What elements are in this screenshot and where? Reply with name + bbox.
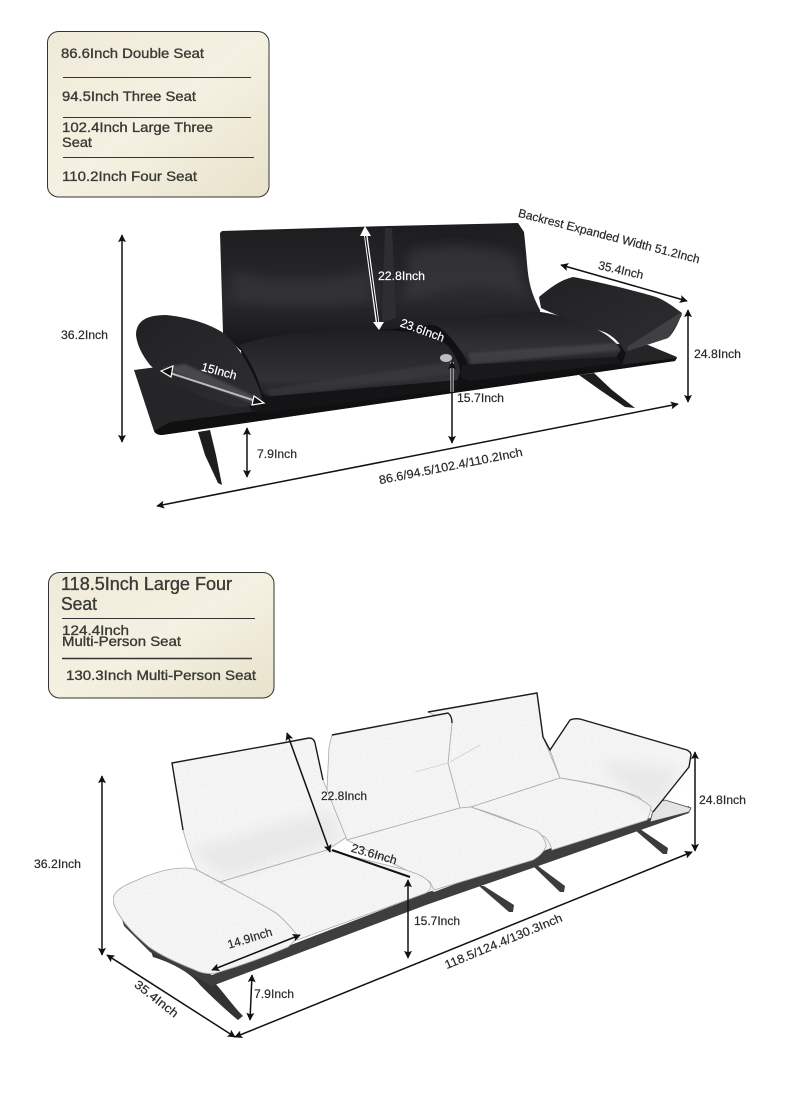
black leather sofa (134, 223, 682, 485)
platform frame (121, 806, 689, 986)
left base leg (149, 946, 243, 1020)
dimension: leg height 7.9: 7.9Inch (254, 987, 294, 1001)
panel: sizes large four to multi-person: 124.4Inch (62, 622, 129, 638)
panel: sizes double to four seat: 102.4Inch Large Three (62, 119, 213, 135)
right armrest (550, 719, 691, 812)
cushion tufts (415, 745, 480, 772)
panel: sizes large four to multi-person: Multi-Person Seat (62, 633, 181, 649)
backrest (220, 223, 541, 350)
sofa legs (198, 373, 635, 485)
dimension: backrest height 22.8 (360, 226, 425, 330)
seat backing fill (347, 778, 650, 892)
dimension: leg height 7.9 (250, 975, 294, 1020)
textured upholstery (113, 693, 691, 974)
dimension: backrest height 22.8: 22.8Inch (378, 269, 425, 283)
dimension: arm height 24.8: 24.8Inch (699, 793, 746, 807)
soft shading (190, 760, 680, 878)
panel: sizes double to four seat: Seat (62, 134, 92, 150)
dimension: armrest 14.9: 14.9Inch (226, 925, 274, 952)
upper outlines (172, 693, 691, 830)
panel: sizes double to four seat: 94.5Inch Three Seat (62, 88, 196, 104)
sofa legs (479, 829, 668, 912)
right backrest (428, 693, 560, 808)
dimension: backrest height 22.8: 22.8Inch (321, 789, 367, 803)
dimension: arm height 24.8 (695, 752, 746, 851)
dimension: seat height 15.7 (408, 880, 460, 958)
middle seat (347, 807, 546, 890)
white boucle sofa (113, 693, 691, 1020)
dimension: depth 35.4 (561, 258, 687, 301)
panel: sizes large four to multi-person (48, 572, 274, 698)
dimension: arm height 24.8: 24.8Inch (694, 347, 741, 361)
left backrest (172, 738, 347, 882)
dimension: backrest height 22.8 (287, 733, 367, 852)
dimension: seat depth 23.6: 23.6Inch (398, 316, 446, 345)
dimension: total height 36.2: 36.2Inch (61, 328, 108, 342)
left armrest cushion (113, 868, 299, 974)
right seat (471, 778, 651, 850)
panel: sizes double to four seat: 86.6Inch Double Seat (61, 45, 204, 61)
left seat (220, 850, 431, 940)
shadow under seats (240, 325, 628, 414)
dimension: total width (157, 404, 678, 506)
dimension: total width: 118.5/124.4/130.3Inch (443, 911, 564, 972)
dimension: total width: 86.6/94.5/102.4/110.2Inch (378, 445, 524, 487)
dimension: depth 35.4: 35.4Inch (132, 977, 181, 1020)
middle backrest (327, 713, 460, 840)
panel: sizes double to four seat (48, 32, 269, 197)
right seat cushion (426, 312, 621, 366)
dimension: seat depth 23.6 (332, 841, 410, 877)
metal highlight (440, 354, 452, 362)
dimension: leg height 7.9 (247, 428, 297, 477)
dimension: armrest 15: 15Inch (200, 360, 238, 383)
panel: sizes double to four seat: 110.2Inch Four Seat (62, 168, 197, 184)
dimension: depth 35.4 (107, 955, 235, 1037)
dimension: armrest 15 (161, 360, 264, 405)
dimension: seat height 15.7 (452, 362, 504, 443)
left armrest (136, 315, 262, 407)
panel: sizes large four to multi-person: 118.5Inch Large Four (61, 574, 232, 594)
panel: sizes large four to multi-person: 130.3Inch Multi-Person Seat (66, 667, 256, 683)
dimension: total height 36.2: 36.2Inch (34, 857, 81, 871)
dimension: leg height 7.9: 7.9Inch (257, 447, 297, 461)
dimension: seat height 15.7: 15.7Inch (457, 391, 504, 405)
panel: sizes large four to multi-person: Seat (61, 594, 97, 614)
label: backrest expanded width: Backrest Expanded Width 51.2Inch (517, 206, 701, 266)
dimension: arm height 24.8 (688, 310, 741, 402)
platform base (134, 345, 677, 435)
dimension: seat depth 23.6: 23.6Inch (350, 841, 399, 867)
dimension: seat height 15.7: 15.7Inch (414, 914, 460, 928)
dimension: depth 35.4: 35.4Inch (597, 258, 645, 282)
left seat cushion (239, 330, 460, 400)
dimension: armrest 14.9 (212, 925, 300, 970)
right armrest (539, 277, 682, 352)
dimension: total width (235, 852, 692, 1037)
